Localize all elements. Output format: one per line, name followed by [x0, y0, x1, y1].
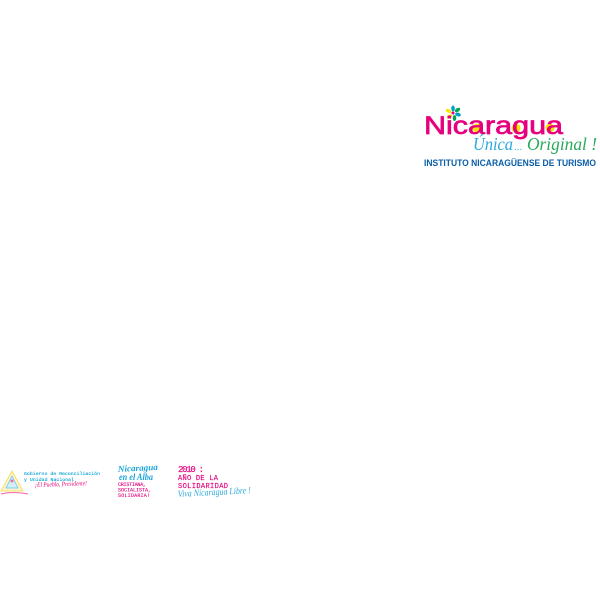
- text: 2010: 2010 :: [178, 465, 204, 475]
- text: Gobierno de Reconciliacion: Gobierno de Reconciliación: [24, 471, 100, 477]
- text: en el Alba: en el Alba: [119, 472, 153, 482]
- text: El Pueblo, Presidente: ¡El Pueblo, Presidente!: [35, 480, 87, 489]
- text: Cristiana: CRISTIANA,: [118, 482, 146, 488]
- icon: triangle emblem: [1, 471, 28, 494]
- icon: flower: [445, 106, 461, 121]
- logo: government of reconciliation: [1, 471, 100, 494]
- wordmark: Nicaragua: Nicaragua: [424, 112, 563, 140]
- accents: yellow letter counters: [472, 124, 554, 132]
- logo: 2010 year of solidarity: [178, 465, 251, 500]
- text: Nicaragua: Nicaragua: [117, 462, 159, 474]
- tagline: Unica: Única: [473, 133, 513, 154]
- text: y Unidad Nacional: y Unidad Nacional: [24, 477, 74, 483]
- tagline: dots: ...: [514, 142, 522, 153]
- text: Socialista: SOCIALISTA,: [118, 488, 151, 494]
- text: Ano de la: AÑO DE LA: [178, 474, 219, 483]
- tagline: Original: Original !: [527, 134, 597, 154]
- logo: Nicaragua en el ALBA: [117, 462, 159, 499]
- text: Viva Nicaragua Libre: Viva Nicaragua Libre !: [178, 486, 251, 500]
- text: Solidaria: SOLIDARIA!: [118, 493, 150, 499]
- logo: Nicaragua tourism: [424, 106, 597, 169]
- text: Solidaridad: SOLIDARIDAD: [178, 483, 228, 491]
